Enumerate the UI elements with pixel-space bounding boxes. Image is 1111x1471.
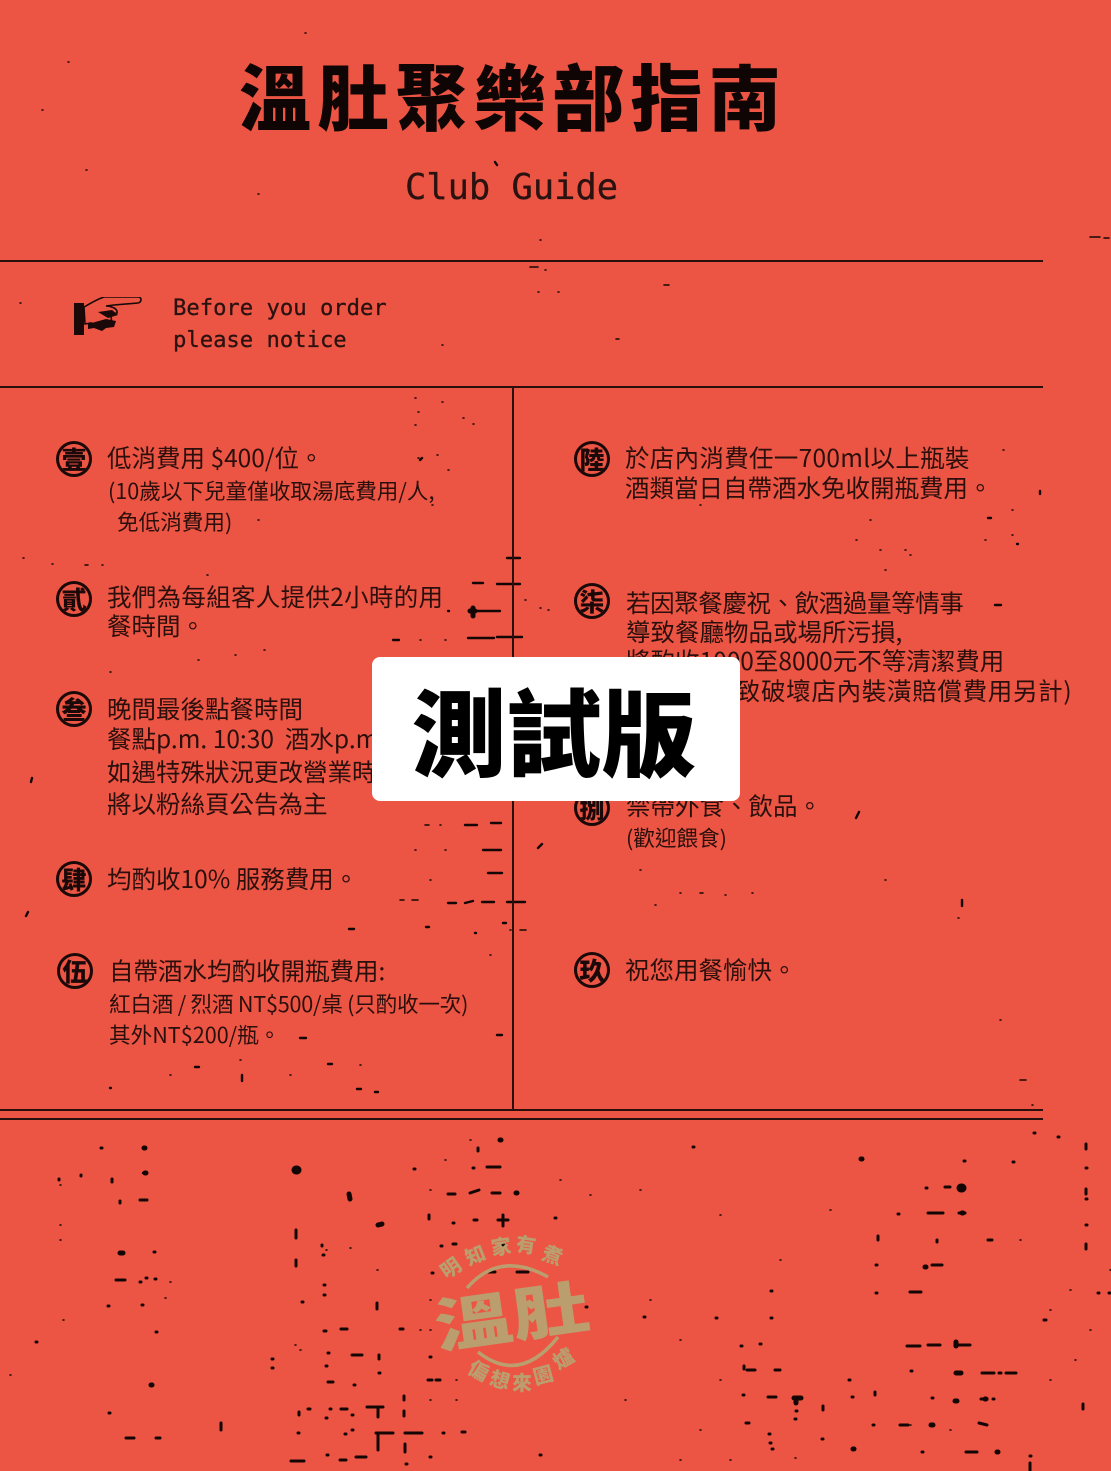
test version badge: 測試版 [411,660,696,797]
rule 6: 酒類當日自帶酒水免收開瓶費用。 [625,470,992,505]
rule 3: 餐點p.m. 10:30 酒水p.m. 11:00 [107,721,452,756]
icon: pointing hand [74,297,142,335]
logo stamp: 園 [529,1357,556,1390]
rule 2: 貳 [61,581,86,617]
panel: left column rules [56,440,468,1050]
rule 7: 導致餐廳物品或場所污損, [626,614,902,649]
rule 5: 伍 [62,953,88,989]
rule 8 [574,788,822,853]
logo stamp: 明 [434,1249,467,1285]
rule 7: 若因聚餐慶祝、飲酒過量等情事 [626,585,963,620]
rule 1: 壹 [61,441,86,477]
rule 5: 其外NT$200/瓶。 [109,1019,280,1050]
rule 1 [56,440,434,537]
rule 8: (歡迎餵食) [626,822,727,853]
logo stamp: 知 [460,1237,490,1271]
rule 4: 均酌收10% 服務費用。 [107,861,358,896]
rule 9: 祝您用餐愉快。 [625,952,796,987]
rule 3: 晚間最後點餐時間 [107,691,303,726]
rule 8: 禁帶外食、飲品。 [626,788,822,823]
logo stamp: 有 [514,1228,538,1259]
rule 7: (如因此導致破壞店內裝潢賠償費用另計) [626,673,1072,708]
rule 3: 將以粉絲頁公告為主 [107,786,328,821]
rule 9: 玖 [579,952,604,988]
rule 7: 將酌收1000至8000元不等清潔費用 [626,643,1004,678]
logo stamp [428,1228,595,1396]
rule 6: 於店內消費任一700ml以上瓶裝 [625,440,970,475]
rule 1: 低消費用 $400/位。 [107,440,323,475]
logo stamp: 溫肚 [428,1259,595,1365]
rule 7: 柒 [579,583,604,619]
rule 3: 如遇特殊狀況更改營業時間 [107,754,401,789]
logo stamp: 家 [489,1230,513,1261]
title: 溫肚聚樂部指南 [239,41,787,146]
rule 7 [574,583,1072,708]
rule 3: 叁 [61,691,86,727]
rule 2: 我們為每組客人提供2小時的用 [107,579,443,614]
rule 6 [574,440,992,505]
rule 2: 餐時間。 [107,608,205,643]
logo stamp: 來 [512,1367,532,1396]
panel: right column rules [574,440,1072,988]
logo stamp: 想 [487,1362,514,1395]
subtitle: Club Guide [405,167,618,208]
rule 4: 肆 [61,861,86,897]
notice text: please notice [173,327,347,353]
rule 8: 捌 [579,790,604,826]
rule 1: (10歲以下兒童僅收取湯底費用/人, [108,475,434,506]
logo stamp: 偏 [463,1352,495,1387]
logo stamp: 煮 [539,1237,567,1271]
rule 2 [56,579,443,643]
rule 1: 免低消費用) [117,506,232,537]
notice text: Before you order [173,295,387,321]
logo stamp: 爐 [547,1340,579,1375]
rule 3 [56,691,452,821]
notice text [173,295,387,353]
rule 5: 自帶酒水均酌收開瓶費用: [109,953,385,988]
rule 5: 紅白酒 / 烈酒 NT$500/桌 (只酌收一次) [109,988,468,1019]
rule 5 [57,953,468,1050]
rule 6: 陸 [579,441,604,477]
